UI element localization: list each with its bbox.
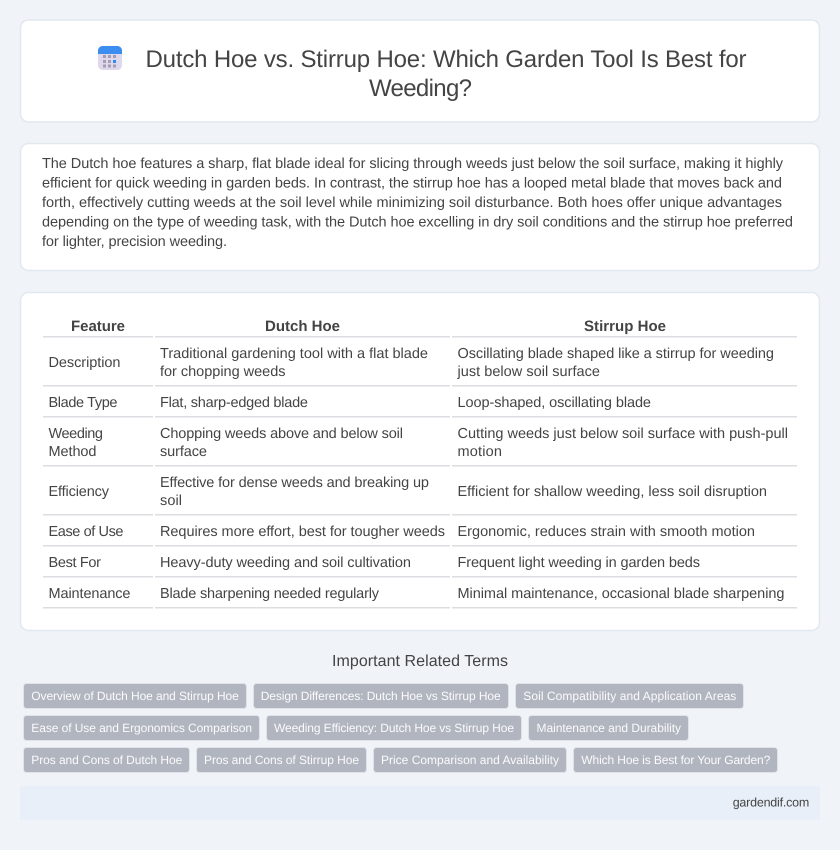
tag [574,748,778,772]
row: maintenance: Blade sharpening needed regularly [160,586,380,602]
tag: Design Differences: Dutch Hoe vs Stirrup Hoe [261,689,501,703]
intro text block: for lighter, precision weeding. [42,234,227,250]
row: blade type [48,395,651,411]
table header row: Feature [71,318,125,335]
intro text block: forth, effectively cutting weeds at the soil level while minimizing soil disturbance. Both hoes offer unique advantages [42,195,782,211]
tag [24,748,190,772]
intro text block: The Dutch hoe features a sharp, flat blade ideal for slicing through weeds just below the soil surface, making it highly [42,156,784,172]
intro text block [42,156,793,250]
tag [516,684,744,708]
row: description: Oscillating blade shaped like a stirrup for weeding [458,346,774,362]
table header row: Stirrup Hoe [584,318,666,335]
tag [24,716,260,740]
tag [24,684,246,708]
row: weeding method: surface [160,444,207,460]
row: ease of use: Requires more effort, best for tougher weeds [160,524,445,540]
tag: Weeding Efficiency: Dutch Hoe vs Stirrup Hoe [274,721,514,735]
tag [374,748,566,772]
table header row: Dutch Hoe [265,318,340,335]
row: description: Description [48,355,120,371]
title: Dutch Hoe vs. Stirrup Hoe: Which Garden Tool Is Best for [146,46,746,73]
row: weeding method [48,426,788,460]
tag: Pros and Cons of Dutch Hoe [31,753,183,767]
tag [528,716,688,740]
tag: Pros and Cons of Stirrup Hoe [204,753,359,767]
footer bar [20,786,820,820]
row: ease of use: Ease of Use [48,524,124,540]
tag: Ease of Use and Ergonomics Comparison [31,721,252,735]
row: description: just below soil surface [456,364,600,380]
related terms tags [24,684,778,772]
row: efficiency [48,475,767,509]
intro text block: depending on the type of weeding task, with the Dutch hoe excelling in dry soil conditions and the stirrup hoe preferred [42,214,793,230]
row: maintenance: Minimal maintenance, occasional blade sharpening [458,586,784,602]
row: efficiency: Efficiency [48,484,110,500]
row: weeding method: Cutting weeds just below soil surface with push-pull [458,426,788,442]
tag: Overview of Dutch Hoe and Stirrup Hoe [31,689,239,703]
row: best for: Frequent light weeding in garden beds [458,555,700,571]
tag [266,716,522,740]
row: efficiency: Efficient for shallow weeding, less soil disruption [458,484,767,500]
footer credit: gardendif.com [733,796,809,810]
row: best for: Heavy-duty weeding and soil cultivation [160,555,411,571]
row: weeding method: motion [458,444,502,460]
row: weeding method: Weeding [48,426,103,442]
panel: comparison table [20,292,820,630]
table header row [71,318,666,335]
tag [254,684,508,708]
title [146,46,746,102]
row: best for: Best For [48,555,101,571]
row: efficiency: Effective for dense weeds and breaking up [160,475,429,491]
tag: Which Hoe is Best for Your Garden? [581,753,771,767]
panel: header [20,20,820,122]
row: description: for chopping weeds [160,364,286,380]
heading: important related terms: Important Related Terms [332,653,508,670]
row: weeding method: Method [48,444,96,460]
tag [196,748,366,772]
row: maintenance [48,586,784,602]
intro text block: efficient for quick weeding in garden beds. In contrast, the stirrup hoe has a looped metal blade that moves back and [42,176,782,192]
tag: Maintenance and Durability [536,721,681,735]
title: Weeding? [369,75,472,102]
row: weeding method: Chopping weeds above and below soil [160,426,403,442]
row: blade type: Flat, sharp-edged blade [160,395,308,411]
tag: Soil Compatibility and Application Areas [523,689,736,703]
row: blade type: Blade Type [48,395,118,411]
row: efficiency: soil [160,493,182,509]
row: blade type: Loop-shaped, oscillating blade [458,395,651,411]
icon: calendar [98,46,122,70]
row: best for [48,555,700,571]
row: description [48,346,774,380]
tag: Price Comparison and Availability [381,753,559,767]
panel: intro paragraph [20,144,820,270]
row: ease of use [48,524,755,540]
row: maintenance: Maintenance [48,586,130,602]
row: ease of use: Ergonomic, reduces strain with smooth motion [458,524,755,540]
row: description: Traditional gardening tool with a flat blade [160,346,428,362]
